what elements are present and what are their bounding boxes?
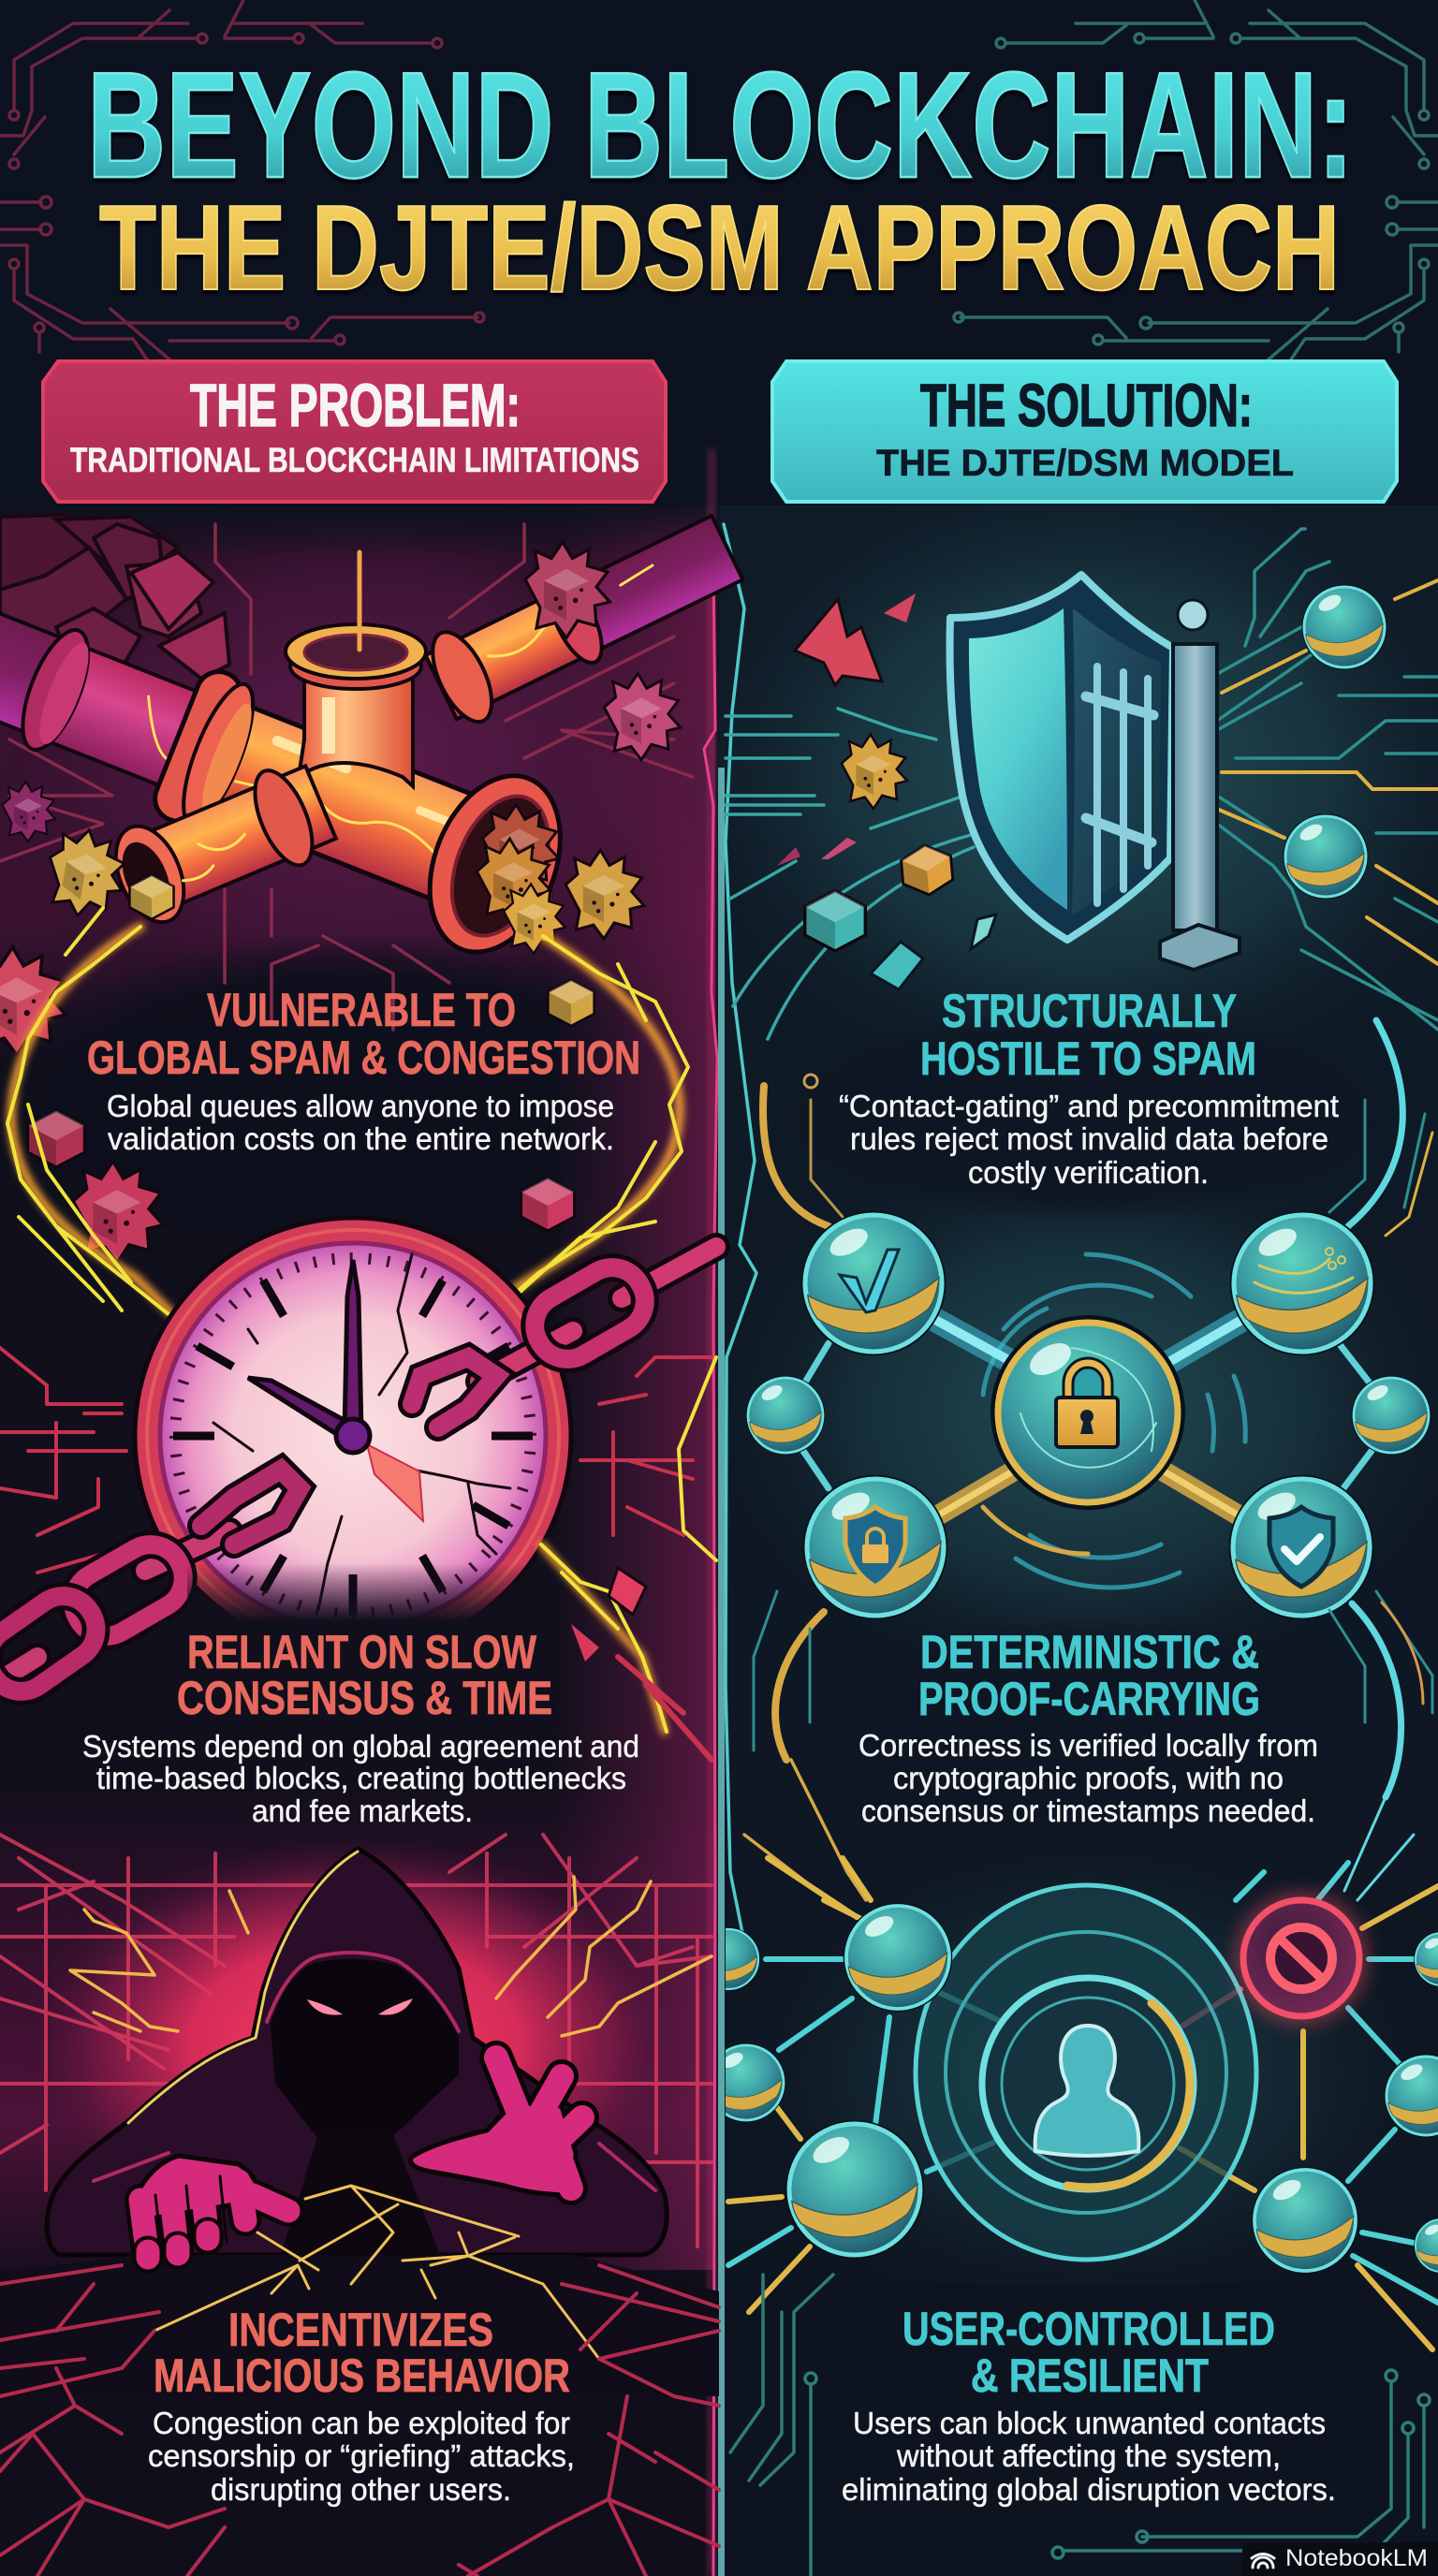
gate post <box>1173 644 1217 930</box>
right orbs <box>1301 584 1387 670</box>
connection lines <box>728 1858 1438 2349</box>
body text: structurally hostile to spam <box>839 1089 1339 1190</box>
redraw hand tips on table <box>148 2232 208 2258</box>
circuit decoration: header right <box>954 0 1438 359</box>
clock hands <box>345 1260 361 1432</box>
person icon <box>1035 2026 1138 2156</box>
main pipe assembly <box>0 572 584 972</box>
heading: deterministic and proof-carrying: DETERMINISTIC & <box>920 1626 1259 1678</box>
heading: deterministic and proof-carrying <box>918 1626 1260 1725</box>
orb: upper left <box>844 1903 952 2012</box>
user glass sphere <box>916 1885 1256 2260</box>
circuit lines <box>1217 529 1438 1030</box>
hood and torso <box>47 1849 667 2255</box>
lightning around clock <box>541 1357 716 1760</box>
illustration: broken clock <box>0 1218 716 1760</box>
heading: reliant on slow consensus <box>177 1626 552 1724</box>
banner subheading: THE DJTE/DSM MODEL <box>876 443 1294 484</box>
body text: reliant on slow consensus: time-based blocks, creating bottlenecks <box>96 1761 626 1795</box>
NotebookLM badge <box>1242 2542 1438 2576</box>
blocks pile top left <box>0 515 229 683</box>
heading: incentivizes malicious behavior <box>154 2304 570 2402</box>
lightning ring around text <box>7 908 688 1322</box>
body text: user-controlled and resilient: eliminating global disruption vectors. <box>842 2472 1336 2507</box>
heading: vulnerable to spam: GLOBAL SPAM & CONGESTION <box>87 1032 640 1084</box>
pink wedge <box>367 1444 423 1521</box>
orb: shield lock <box>803 1475 947 1619</box>
panel: right solution background <box>674 459 1438 2576</box>
connectors <box>803 1315 1372 1516</box>
gate bars <box>1086 666 1153 903</box>
heading: user-controlled and resilient: USER-CONTROLLED <box>902 2303 1275 2355</box>
heading: structurally hostile to spam <box>920 985 1256 1085</box>
red crack floor <box>0 2265 719 2576</box>
orb: lower left <box>785 2120 924 2259</box>
illustration: shield gate <box>726 529 1438 1236</box>
shard <box>571 1624 599 1661</box>
body text: incentivizes malicious behavior: censorship or “griefing” attacks, <box>148 2438 575 2473</box>
minute ticks <box>172 1255 534 1617</box>
orb: shield check <box>1229 1475 1373 1619</box>
body text: incentivizes malicious behavior: Congestion can be exploited for <box>153 2406 570 2440</box>
gold lightning <box>70 1877 712 2036</box>
lower left pipe <box>103 755 340 932</box>
left stream lines <box>726 709 974 1039</box>
body text: user-controlled and resilient: without affecting the system, <box>896 2438 1281 2473</box>
orb: circuit <box>1230 1211 1374 1355</box>
hour ticks <box>173 1281 533 1616</box>
heading: structurally hostile to spam: STRUCTURALLY <box>942 985 1237 1037</box>
illustration: user-controlled network <box>697 1858 1438 2576</box>
body text: vulnerable to spam: validation costs on the entire network. <box>108 1121 614 1156</box>
orbs at left edge <box>726 1928 786 2122</box>
badge label: NotebookLM <box>1285 2545 1428 2571</box>
body text: vulnerable to spam: Global queues allow anyone to impose <box>107 1089 614 1123</box>
chain lower left <box>0 1470 300 1704</box>
body text: reliant on slow consensus <box>82 1729 639 1828</box>
body text: user-controlled and resilient: Users can block unwanted contacts <box>853 2406 1326 2440</box>
badge icon <box>1252 2554 1274 2568</box>
spam cubes <box>41 824 131 922</box>
body text: reliant on slow consensus: Systems depend on global agreement and <box>82 1729 639 1764</box>
eyes <box>307 1998 413 2015</box>
clock rim <box>135 1218 571 1654</box>
orb: edge right 2 <box>1414 1931 1438 1987</box>
heading: reliant on slow consensus: RELIANT ON SLOW <box>187 1626 537 1678</box>
orb: checkmark <box>801 1211 946 1355</box>
concentric rings <box>983 1254 1245 1588</box>
body text: structurally hostile to spam: rules reject most invalid data before <box>850 1121 1328 1156</box>
illustration: hooded attacker <box>0 1835 719 2576</box>
banner: the problem <box>43 361 666 502</box>
hood edge highlight <box>128 1852 358 2123</box>
divider between panels <box>704 449 756 2576</box>
gold web <box>154 2186 599 2359</box>
banner heading: THE PROBLEM: <box>190 372 521 439</box>
body text: deterministic and proof-carrying: Correctness is verified locally from <box>858 1728 1318 1763</box>
chain upper right <box>412 1247 716 1427</box>
cracks <box>213 1254 510 1610</box>
body text: user-controlled and resilient <box>842 2406 1336 2507</box>
heading: user-controlled and resilient: & RESILIENT <box>971 2349 1209 2402</box>
body text: deterministic and proof-carrying <box>858 1728 1318 1828</box>
heading: vulnerable to spam <box>87 984 640 1084</box>
arcs to user network <box>775 1612 824 1760</box>
heading: reliant on slow consensus: CONSENSUS & TIME <box>177 1672 552 1724</box>
body text: incentivizes malicious behavior: disrupting other users. <box>211 2472 511 2507</box>
right hand <box>410 2057 582 2195</box>
blocked contact node <box>1234 1891 1369 2026</box>
orb: lower right <box>1252 2167 1358 2274</box>
body text: incentivizes malicious behavior <box>148 2406 575 2507</box>
orb: edge right 3 <box>1414 2217 1438 2274</box>
hood interior <box>271 1959 459 2139</box>
left hand <box>133 2156 288 2261</box>
orb: small left <box>746 1376 825 1455</box>
spire <box>358 552 361 650</box>
heading: structurally hostile to spam: HOSTILE TO SPAM <box>920 1032 1256 1085</box>
title <box>87 41 1354 315</box>
circuit traces <box>730 2275 1430 2576</box>
illustration: proof node network <box>744 1211 1432 1900</box>
rejected fragments <box>795 599 882 685</box>
heading: vulnerable to spam: VULNERABLE TO <box>207 984 516 1036</box>
clock fade to dark <box>187 1563 524 1621</box>
body text: vulnerable to spam <box>107 1089 614 1156</box>
body text: structurally hostile to spam: “Contact-gating” and precommitment <box>839 1089 1339 1123</box>
clock face <box>160 1243 546 1629</box>
panel: left problem background <box>0 477 758 2576</box>
shield <box>950 575 1173 940</box>
illustration: congested pipe <box>0 504 749 1263</box>
heading: user-controlled and resilient <box>902 2303 1275 2402</box>
body text: reliant on slow consensus: and fee markets. <box>252 1793 473 1828</box>
body text: deterministic and proof-carrying: consensus or timestamps needed. <box>861 1793 1315 1828</box>
arcs to network <box>763 1086 829 1226</box>
banner: the solution <box>772 361 1397 502</box>
table edge <box>0 2255 719 2396</box>
vertical collar and neck <box>286 624 426 786</box>
heading: incentivizes malicious behavior: MALICIOUS BEHAVIOR <box>154 2349 570 2402</box>
body text: structurally hostile to spam: costly verification. <box>968 1155 1209 1190</box>
padlock <box>1056 1363 1118 1447</box>
central orb <box>990 1315 1185 1510</box>
upper right pipe <box>419 504 749 731</box>
banner subheading: TRADITIONAL BLOCKCHAIN LIMITATIONS <box>70 441 639 479</box>
orb: edge right 1 <box>1384 2054 1438 2138</box>
orb: small right <box>1352 1376 1431 1455</box>
banner heading: THE SOLUTION: <box>920 372 1253 439</box>
circuit decoration: header left <box>0 0 484 359</box>
wireframe grid <box>0 1835 712 2247</box>
heading: deterministic and proof-carrying: PROOF-CARRYING <box>918 1673 1260 1725</box>
heading: incentivizes malicious behavior: INCENTIVIZES <box>228 2304 493 2356</box>
body text: deterministic and proof-carrying: cryptographic proofs, with no <box>893 1761 1284 1795</box>
